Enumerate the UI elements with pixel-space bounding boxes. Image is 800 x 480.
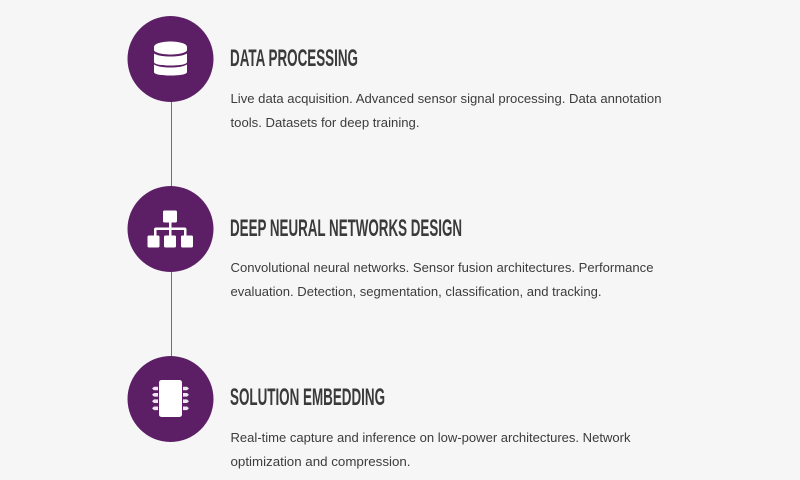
- step 3: solution embedding: [128, 356, 631, 469]
- step 2: deep neural networks design: [128, 186, 654, 299]
- text block: deep neural networks description: [230, 260, 654, 299]
- text block: solution embedding description: [230, 430, 631, 469]
- text block: data processing description: [230, 91, 662, 130]
- step 1: data processing: [128, 16, 662, 130]
- text block: solution embedding description: Real-time capture and inference on low-power architectures. Network: [230, 430, 631, 445]
- heading: solution embedding: SOLUTION EMBEDDING: [230, 384, 385, 411]
- connector line: step 2 to step 3: [171, 270, 172, 358]
- icon: database: [128, 16, 214, 102]
- text block: data processing description: Live data acquisition. Advanced sensor signal processing. Data annotation: [230, 91, 662, 106]
- text block: solution embedding description: optimization and compression.: [230, 454, 410, 469]
- text block: data processing description: tools. Datasets for deep training.: [230, 115, 420, 130]
- text block: deep neural networks description: Convolutional neural networks. Sensor fusion architectures. Performance: [230, 260, 654, 275]
- text block: deep neural networks description: evaluation. Detection, segmentation, classification, and tracking.: [230, 284, 602, 299]
- icon: hierarchy: [128, 186, 214, 272]
- icon: microchip: [128, 356, 214, 442]
- heading: deep neural networks design: DEEP NEURAL NETWORKS DESIGN: [230, 215, 462, 242]
- connector line: step 1 to step 2: [171, 100, 172, 188]
- heading: data processing: DATA PROCESSING: [230, 45, 358, 72]
